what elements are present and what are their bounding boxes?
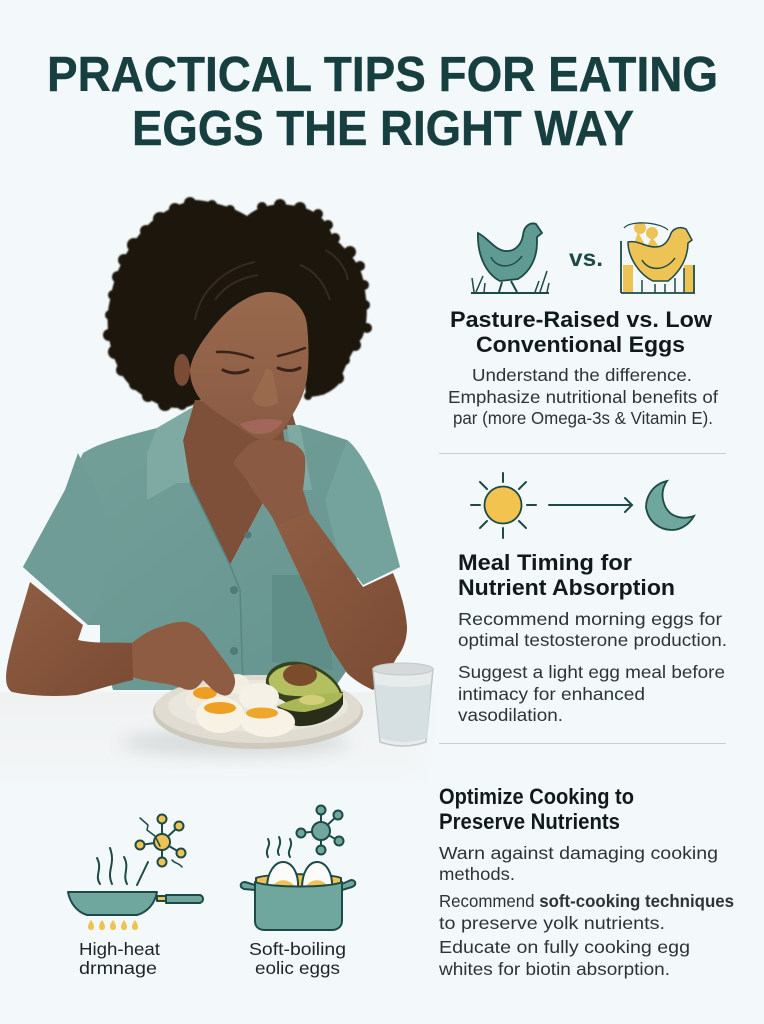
section: meal timing: Suggest a light egg meal before: [458, 662, 725, 682]
gap between arm and body: [80, 625, 100, 642]
section: pasture-raised eggs: Conventional Eggs: [476, 332, 685, 357]
section: meal timing: Nutrient Absorption: [458, 575, 675, 600]
section: meal timing: optimal testosterone production.: [458, 630, 727, 650]
nose: [252, 368, 278, 407]
ear: [174, 354, 190, 386]
right sleeve: [325, 440, 400, 585]
section: cooking: Warn against damaging cooking: [439, 843, 718, 863]
water glass: [373, 663, 433, 746]
right arm: [277, 513, 407, 690]
icon label: high-heat: [79, 939, 160, 978]
right hand at chin: [233, 440, 310, 527]
shirt body: [23, 407, 400, 690]
label: vs.: vs.: [569, 245, 603, 271]
left sleeve: [23, 453, 115, 625]
shirt collar: [147, 407, 312, 500]
section: pasture-raised eggs: Understand the difference.: [472, 365, 692, 385]
section: cooking: Educate on fully cooking egg: [439, 937, 690, 957]
title: EGGS THE RIGHT WAY: [132, 102, 634, 156]
icon label: soft-boiling: [249, 939, 346, 978]
icon: moon: [646, 481, 694, 530]
left arm: [6, 582, 135, 696]
section: meal timing: intimacy for enhanced: [458, 684, 645, 704]
title: PRACTICAL TIPS FOR EATING: [47, 48, 718, 102]
section: meal timing: Meal Timing for: [458, 550, 632, 575]
section: cooking: methods.: [439, 864, 515, 884]
section: cooking: [438, 784, 734, 979]
eyebrows and eyes: [217, 348, 305, 373]
icon: pasture-raised hen: [471, 223, 549, 293]
hair: [103, 197, 372, 411]
neck and chest: [180, 400, 300, 565]
icon label: high-heat: High-heat: [79, 939, 160, 959]
mouth: [240, 419, 283, 434]
title: [47, 48, 718, 156]
boiled eggs: [185, 674, 295, 737]
section: cooking: Recommend soft-cooking techniques: [439, 891, 734, 911]
section: pasture-raised eggs: Pasture-Raised vs. Low: [450, 307, 713, 332]
hair curls: [195, 250, 348, 320]
icon: frying pan with damaged nutrient: [68, 814, 203, 930]
plate shadow: [120, 730, 350, 756]
table surface: [0, 692, 442, 792]
shirt buttons: [230, 532, 252, 655]
section: cooking: whites for biotin absorption.: [438, 959, 670, 979]
face: [190, 292, 308, 441]
section: meal timing: [458, 550, 727, 725]
left hand picking egg: [132, 622, 235, 696]
section: cooking: to preserve yolk nutrients.: [439, 913, 665, 933]
avocados: [266, 662, 343, 726]
icon label: high-heat: drmnage: [79, 958, 157, 978]
section: cooking: Optimize Cooking to: [439, 784, 634, 809]
section: pasture-raised eggs: par (more Omega-3s & Vitamin E).: [453, 408, 713, 428]
icon: conventional hen in cage: [621, 222, 695, 293]
icon: pot with eggs and nutrient: [241, 806, 355, 930]
plate: [153, 675, 363, 749]
section: meal timing: Recommend morning eggs for: [458, 609, 722, 629]
icon label: soft-boiling: Soft-boiling: [249, 939, 346, 959]
icon: sun: [471, 473, 536, 538]
section: cooking: Preserve Nutrients: [439, 809, 620, 834]
photo: woman thinking at table: [6, 197, 433, 756]
shirt placket: [190, 483, 243, 690]
arrow: morning to night: [549, 498, 632, 512]
section: pasture-raised eggs: [448, 307, 718, 428]
pocket: [272, 575, 333, 670]
section: pasture-raised eggs: Emphasize nutritional benefits of: [448, 387, 718, 407]
section: meal timing: vasodilation.: [458, 705, 563, 725]
icon label: soft-boiling: eolic eggs: [255, 958, 340, 978]
